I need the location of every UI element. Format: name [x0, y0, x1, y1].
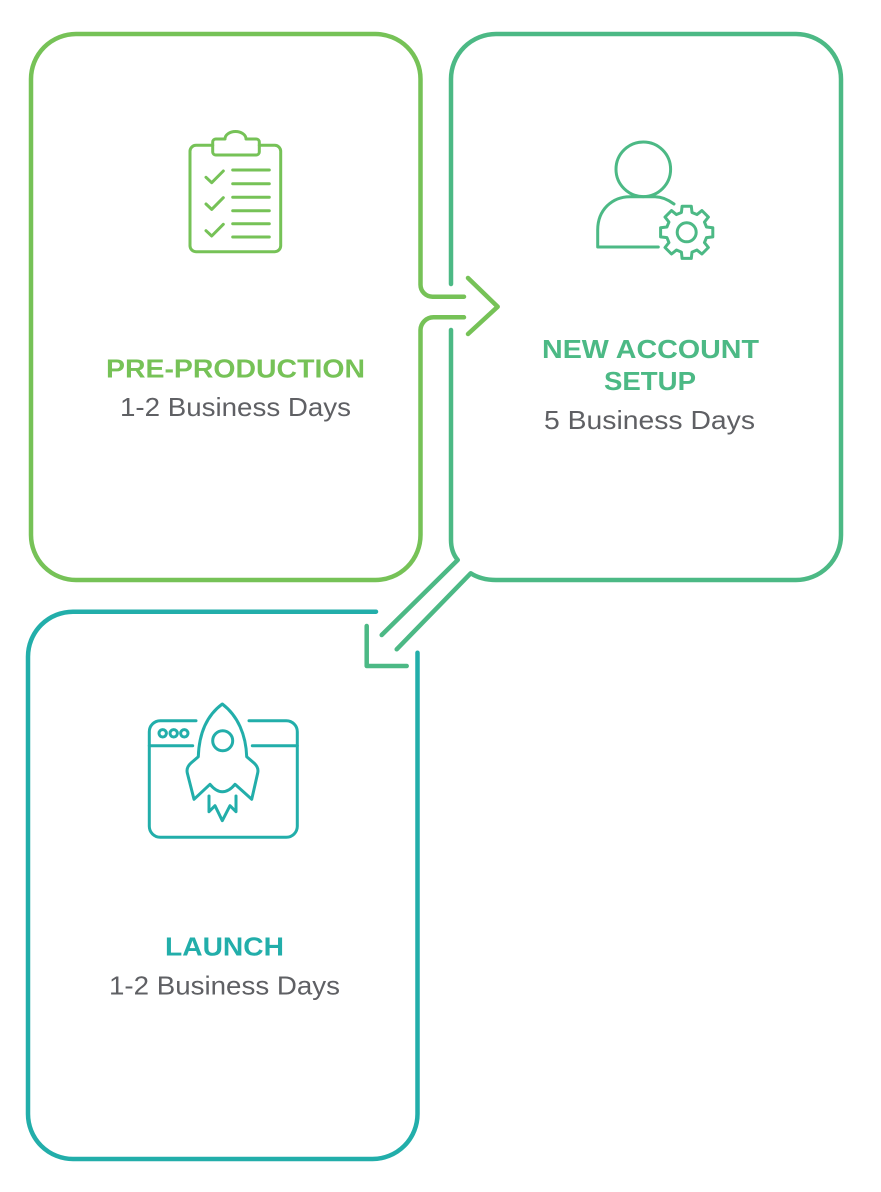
- panel: new account setup: [367, 34, 841, 666]
- icon: rocket in browser window: [149, 704, 297, 837]
- duration: pre-production: 1-2 Business Days: [120, 392, 351, 422]
- panel outline with arrow: [367, 34, 841, 666]
- icon: user with gear: [598, 142, 713, 258]
- panel outline: [28, 612, 418, 1159]
- duration: launch: 1-2 Business Days: [109, 970, 340, 1000]
- panel outline with arrow: [31, 34, 498, 580]
- duration: new account setup: 5 Business Days: [544, 405, 755, 435]
- panel: launch: [28, 612, 418, 1159]
- icon: clipboard checklist: [190, 132, 281, 252]
- heading: new account setup: [542, 334, 759, 396]
- heading: launch: LAUNCH: [165, 932, 284, 962]
- heading: new account setup: NEW ACCOUNT: [542, 334, 759, 364]
- heading: new account setup: SETUP: [604, 366, 696, 396]
- heading: pre-production: PRE-PRODUCTION: [106, 354, 365, 384]
- panel: pre-production: [31, 34, 498, 580]
